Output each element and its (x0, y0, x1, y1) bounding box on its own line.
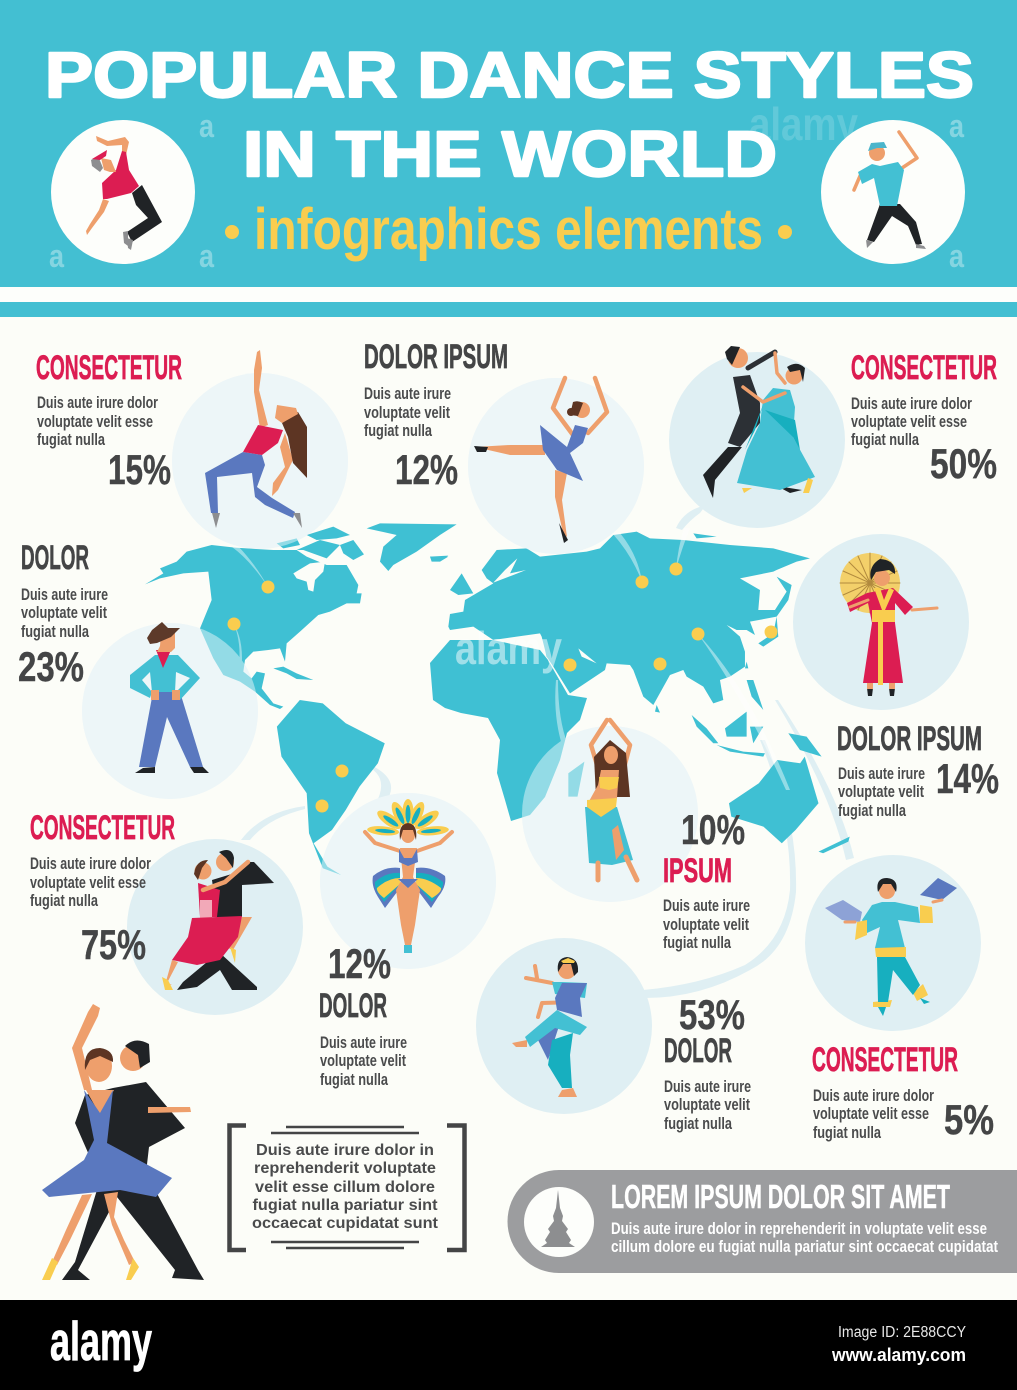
text block: consectetur 5% (812, 1041, 994, 1143)
text block: ipsum 10%: Duis aute irure (663, 897, 750, 915)
text block: consectetur 5%: fugiat nulla (813, 1124, 882, 1142)
text block: dolor 23%: 23% (18, 643, 84, 690)
text block: dolor 12% (319, 940, 407, 1089)
text block: consectetur 75%: Duis aute irure dolor (30, 855, 151, 873)
bracketed callout: occaecat cupidatat sunt (252, 1215, 438, 1232)
title: IN THE WORLD (243, 118, 777, 190)
text block: dolor 23%: fugiat nulla (21, 623, 90, 641)
bracketed callout: Duis aute irure dolor in (256, 1142, 434, 1159)
text block: dolor 53%: voluptate velit (664, 1096, 750, 1114)
text block: consectetur 50%: 50% (930, 440, 997, 487)
text block: dolor 53% (664, 991, 751, 1133)
text block: dolor 53%: 53% (679, 991, 745, 1038)
image id: Image ID: 2E88CCY (838, 1324, 966, 1341)
header banner: alamy (749, 98, 858, 150)
header banner (0, 0, 1017, 317)
title: POPULAR DANCE STYLES (45, 39, 974, 111)
icon: ballerina (474, 378, 607, 543)
text block: dolor ipsum 14%: Duis aute irure (838, 765, 925, 783)
text block: dolor 12%: fugiat nulla (320, 1071, 389, 1089)
icon: indian dancer (512, 957, 587, 1097)
text block: ipsum 10%: voluptate velit (663, 916, 749, 934)
text block: dolor ipsum 14%: voluptate velit (838, 783, 924, 801)
text block: consectetur 75%: CONSECTETUR (30, 809, 175, 847)
header banner: a (49, 238, 64, 274)
watermark: alamy (455, 622, 562, 674)
icon: couple illustration (42, 1004, 204, 1280)
icon: samba dancer (365, 799, 452, 953)
text block: dolor 12%: DOLOR (319, 987, 387, 1025)
text block: ipsum 10%: 10% (681, 806, 745, 853)
text block: consectetur 75% (30, 809, 175, 968)
icon: contemporary dancer (205, 350, 307, 528)
text block: consectetur 15% (36, 349, 182, 493)
footer bar (0, 1300, 1017, 1390)
text block: consectetur 15%: Duis aute irure dolor (37, 394, 158, 412)
bracketed callout: fugiat nulla pariatur sint (252, 1197, 438, 1214)
icon: cowboy (130, 622, 209, 773)
text block: dolor 23%: Duis aute irure (21, 586, 108, 604)
text block: dolor 23% (18, 539, 108, 690)
icon: header dancer right (821, 120, 965, 264)
Eurasia (430, 532, 822, 757)
header banner: a (949, 238, 964, 274)
text block: ipsum 10%: fugiat nulla (663, 934, 732, 952)
text block: ipsum 10% (663, 806, 750, 952)
icon: ballroom couple (703, 346, 815, 498)
North and Central America (145, 523, 457, 709)
footer url: www.alamy.com (831, 1345, 966, 1365)
footer logo: alamy (50, 1310, 152, 1372)
map circle overlay (82, 373, 790, 969)
panel: dance circles (82, 352, 981, 1114)
text block: dolor ipsum 12%: 12% (395, 446, 458, 493)
icon: geisha with parasol (840, 553, 937, 696)
icon: tango couple (162, 850, 274, 990)
text block: consectetur 75%: fugiat nulla (30, 892, 99, 910)
text block: ipsum 10%: IPSUM (663, 852, 732, 890)
text block: dolor 12%: 12% (328, 940, 391, 987)
text block: dolor 53%: fugiat nulla (664, 1115, 733, 1133)
header banner: a (949, 108, 964, 144)
text block: consectetur 75%: voluptate velit esse (30, 874, 146, 892)
bracketed callout (230, 1126, 464, 1250)
world map (145, 523, 850, 875)
bracketed callout: reprehenderit voluptate (254, 1160, 436, 1177)
text block: dolor 23%: DOLOR (21, 539, 89, 577)
text block: consectetur 50%: Duis aute irure dolor (851, 395, 972, 413)
header banner: a (199, 108, 214, 144)
subtitle: infographics elements (254, 197, 763, 262)
header banner: a (199, 238, 214, 274)
grey banner (508, 1170, 1017, 1273)
text block: dolor ipsum 12%: DOLOR IPSUM (364, 338, 508, 376)
title (45, 39, 974, 190)
text block: consectetur 50%: fugiat nulla (851, 431, 920, 449)
text block: dolor ipsum 12%: fugiat nulla (364, 422, 433, 440)
text block: dolor 12%: voluptate velit (320, 1052, 406, 1070)
icon: belly dancer (585, 720, 637, 880)
text block: consectetur 15%: CONSECTETUR (36, 349, 182, 387)
text block: consectetur 15%: 15% (108, 446, 171, 493)
text block: dolor 12%: Duis aute irure (320, 1034, 407, 1052)
South America, Australia, islands (277, 700, 850, 875)
text block: consectetur 15%: voluptate velit esse (37, 413, 153, 431)
text block: dolor ipsum 14%: fugiat nulla (838, 802, 907, 820)
Africa (430, 640, 587, 821)
text block: dolor ipsum 14% (837, 720, 999, 820)
text block: consectetur 75%: 75% (81, 921, 146, 968)
text block: dolor 53%: Duis aute irure (664, 1078, 751, 1096)
bracketed callout: velit esse cillum dolore (255, 1179, 435, 1196)
text block: consectetur 5%: 5% (944, 1096, 994, 1143)
text block: dolor 53%: DOLOR (664, 1032, 732, 1070)
text block: consectetur 50% (851, 349, 997, 487)
banner body (611, 1219, 998, 1256)
text block: dolor 23%: voluptate velit (21, 604, 107, 622)
text block: consectetur 5%: voluptate velit esse (813, 1105, 929, 1123)
text block: dolor ipsum 12%: voluptate velit (364, 404, 450, 422)
icon: header dancer left (51, 120, 195, 264)
text block: consectetur 5%: Duis aute irure dolor (813, 1087, 934, 1105)
icon: fan dancer (825, 878, 957, 1016)
text block: consectetur 50%: voluptate velit esse (851, 413, 967, 431)
text block: dolor ipsum 12% (364, 338, 508, 493)
text block: dolor ipsum 12%: Duis aute irure (364, 385, 451, 403)
map location dots (228, 562, 778, 812)
text block: consectetur 15%: fugiat nulla (37, 431, 106, 449)
icon: temple (541, 1190, 575, 1247)
